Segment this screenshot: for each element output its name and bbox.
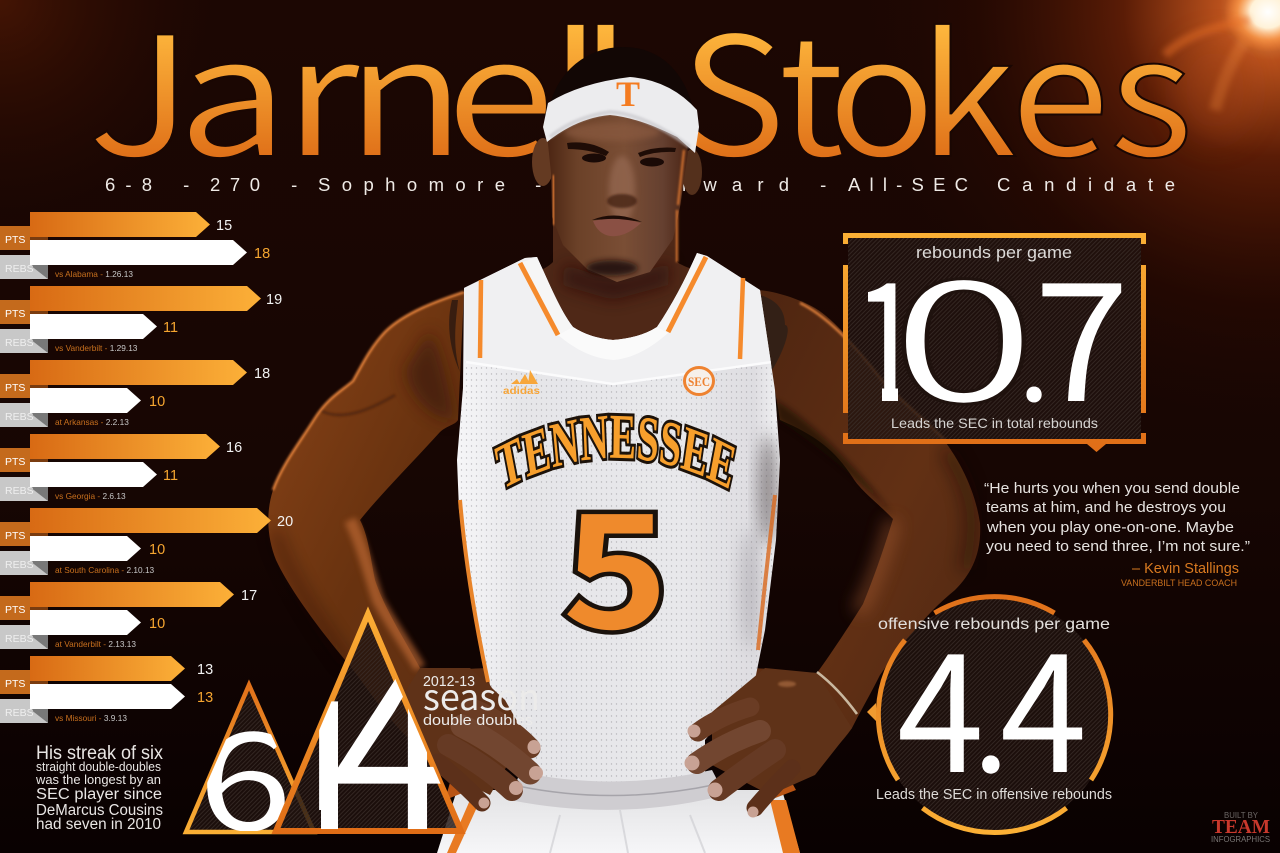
game 2 bars	[0, 286, 282, 353]
quote: when you play one-on-one. Maybe	[986, 520, 1234, 536]
hair	[548, 47, 696, 130]
quote: – Kevin Stallings	[1132, 560, 1239, 577]
game 7 bars	[0, 656, 213, 723]
headband	[543, 74, 699, 153]
quote: you need to send three, I’m not sure.”	[986, 539, 1250, 555]
game 3 bars: 10	[149, 394, 165, 410]
TENNESSEE wordmark: TENNESSEE	[492, 412, 738, 492]
game 3 bars: 18	[254, 366, 270, 382]
game 6 bars: REBS	[5, 633, 34, 645]
quote: “He hurts you when you send double	[984, 481, 1240, 497]
game 4 bars: REBS	[5, 485, 34, 497]
subtitle: 270	[210, 174, 260, 195]
panel frame	[843, 233, 1146, 452]
stat value 10.7	[868, 277, 1122, 406]
neck	[520, 210, 715, 352]
game 4 bars	[0, 434, 242, 501]
quote: teams at him, and he destroys you	[986, 500, 1226, 516]
game 4 bars: vs Georgia - 2.6.13	[55, 491, 126, 501]
game 5 bars	[0, 508, 293, 575]
stat value 10.7: 1	[853, 211, 922, 450]
game 6 bars: at Vanderbilt - 2.13.13	[55, 639, 136, 649]
game 7 bars: 13	[197, 662, 213, 678]
season double doubles label: season	[423, 669, 540, 721]
game 3 bars: PTS	[5, 382, 25, 394]
season double doubles label: 2012-13	[423, 673, 475, 690]
subtitle: Candidate	[997, 174, 1175, 195]
streak text: straight double-doubles	[36, 760, 161, 774]
neck shadow	[562, 260, 670, 300]
streak text	[35, 743, 163, 833]
ring arcs	[878, 597, 1111, 833]
game 5 bars: at South Carolina - 2.10.13	[55, 565, 155, 575]
number 5: 5	[562, 444, 669, 674]
SEC logo: SEC	[688, 374, 710, 389]
game 2 bars: 19	[266, 292, 282, 308]
subtitle: Forward	[630, 174, 789, 195]
stat value 4.4	[897, 581, 1087, 820]
subtitle: Sophomore	[318, 174, 505, 195]
game 7 bars: REBS	[5, 707, 34, 719]
game 2 bars: 11	[163, 320, 178, 336]
title	[87, 0, 1193, 204]
stat value 4.4: 4	[897, 581, 984, 820]
game 3 bars: at Arkansas - 2.2.13	[55, 417, 129, 427]
game 4 bars: 16	[226, 440, 242, 456]
game 1 bars: REBS	[5, 263, 34, 275]
game 1 bars: 18	[254, 246, 270, 262]
game 6 bars: 17	[241, 588, 257, 604]
lens flare	[1165, 0, 1280, 140]
player photo illustration	[228, 47, 1020, 853]
stat value 4.4: 4	[1000, 581, 1087, 820]
game 1 bars	[0, 212, 270, 279]
credit: built by team infographics: INFOGRAPHICS	[1211, 834, 1270, 844]
game 2 bars: vs Vanderbilt - 1.29.13	[55, 343, 138, 353]
subtitle: -	[530, 174, 546, 195]
game 2 bars: PTS	[5, 308, 25, 320]
headband: T	[616, 74, 640, 114]
face	[546, 105, 688, 282]
right arm	[730, 290, 980, 790]
wristband	[817, 672, 857, 714]
streak text: was the longest by an	[35, 773, 161, 787]
subtitle: -	[286, 174, 302, 195]
left hand	[400, 668, 543, 808]
game 2 bars: REBS	[5, 337, 34, 349]
subtitle: -	[178, 174, 194, 195]
panel: offensive rebounds per game: Leads the SEC in offensive rebounds	[876, 787, 1112, 803]
game 5 bars: PTS	[5, 530, 25, 542]
game 6 bars	[0, 582, 257, 649]
game 6 bars: 10	[149, 616, 165, 632]
adidas logo	[503, 370, 540, 397]
streak text: had seven in 2010	[36, 816, 161, 833]
jersey	[455, 250, 785, 790]
game 4 bars: 11	[163, 468, 178, 484]
SEC logo	[684, 368, 714, 394]
game 5 bars: 20	[277, 514, 293, 530]
stat value 10.7: 0	[890, 205, 1037, 451]
panel: offensive rebounds per game: offensive rebounds per game	[878, 616, 1110, 633]
credit: built by team infographics: BUILT BY	[1224, 810, 1258, 820]
stat value 4.4: .	[972, 620, 1009, 811]
panel: rebounds per game: Leads the SEC in total rebounds	[891, 415, 1098, 431]
streak text: His streak of six	[36, 743, 163, 764]
stat value 10.7: .	[1018, 268, 1050, 435]
game 1 bars: PTS	[5, 234, 25, 246]
streak text: SEC player since	[36, 786, 162, 803]
streak text: DeMarcus Cousins	[36, 802, 163, 819]
game 3 bars: REBS	[5, 411, 34, 423]
subtitle: All-SEC	[848, 174, 968, 195]
adidas logo: adidas	[503, 385, 540, 397]
game 5 bars: 10	[149, 542, 165, 558]
panel: rebounds per game	[843, 233, 1146, 452]
game 1 bars: 15	[216, 218, 232, 234]
quote: VANDERBILT HEAD COACH	[1121, 578, 1237, 588]
quote	[984, 481, 1250, 588]
subtitle: -	[815, 174, 831, 195]
big triangle: 14 double doubles	[272, 606, 466, 834]
game 4 bars: PTS	[5, 456, 25, 468]
subtitle: 6-8	[105, 174, 152, 195]
credit: built by team infographics	[1211, 810, 1270, 844]
left arm	[268, 292, 495, 767]
panel: rebounds per game: rebounds per game	[916, 244, 1072, 262]
ears	[532, 138, 702, 195]
shorts	[437, 765, 800, 853]
game 6 bars: PTS	[5, 604, 25, 616]
season double doubles label: double doubles	[423, 713, 533, 729]
game 5 bars: REBS	[5, 559, 34, 571]
game 7 bars: 13	[197, 690, 213, 706]
right hand	[684, 668, 852, 818]
game 7 bars: vs Missouri - 3.9.13	[55, 713, 127, 723]
game 3 bars	[0, 360, 270, 427]
game 1 bars: vs Alabama - 1.26.13	[55, 269, 133, 279]
game 7 bars: PTS	[5, 678, 25, 690]
stat value 10.7: 7	[1034, 211, 1129, 449]
credit: built by team infographics: TEAM	[1212, 816, 1270, 838]
panel: offensive rebounds per game	[867, 581, 1112, 833]
